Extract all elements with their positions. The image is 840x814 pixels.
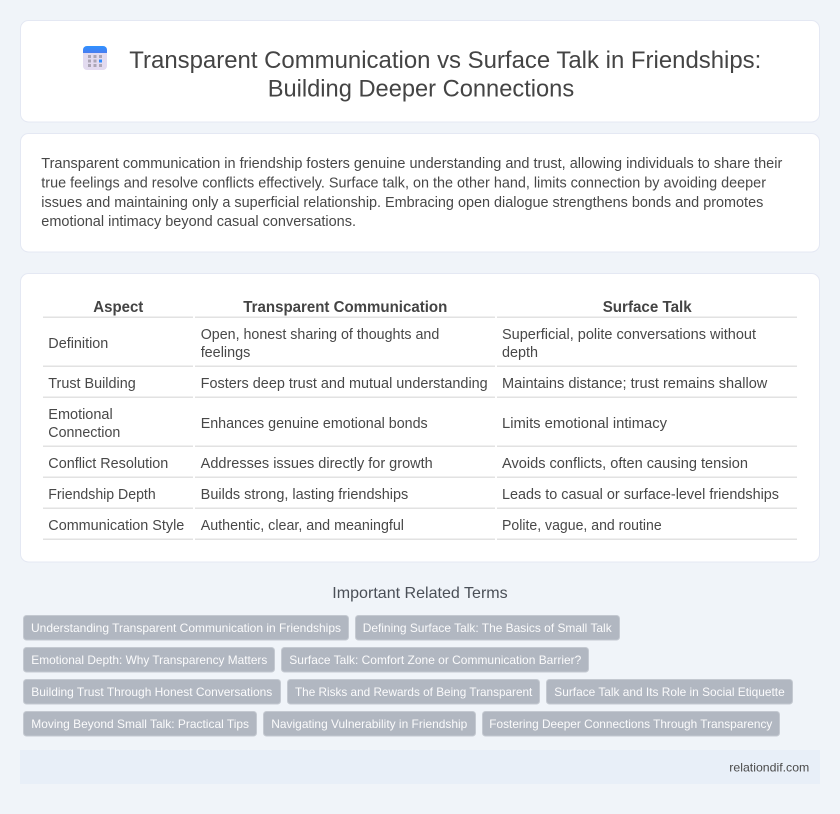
tag: Surface Talk and Its Role in Social Etiquette bbox=[554, 685, 785, 699]
tag bbox=[282, 648, 588, 672]
tag bbox=[482, 712, 780, 736]
tag: Defining Surface Talk: The Basics of Small Talk bbox=[363, 621, 613, 635]
row: communication style: Polite, vague, and routine bbox=[502, 518, 662, 534]
row: trust building: Maintains distance; trust remains shallow bbox=[502, 376, 768, 392]
tag: Moving Beyond Small Talk: Practical Tips bbox=[31, 717, 249, 731]
tag bbox=[546, 680, 792, 704]
tag bbox=[24, 680, 280, 704]
row: emotional connection: Enhances genuine emotional bonds bbox=[201, 416, 428, 432]
tag: Building Trust Through Honest Conversations bbox=[31, 685, 272, 699]
intro text bbox=[41, 156, 782, 230]
row: conflict resolution: Conflict Resolution bbox=[48, 456, 168, 472]
tag: The Risks and Rewards of Being Transparent bbox=[295, 685, 533, 699]
row: emotional connection: Limits emotional intimacy bbox=[502, 416, 668, 432]
panel: related term tags bbox=[24, 616, 792, 736]
footer site name: relationdif.com bbox=[729, 760, 809, 774]
row: friendship depth bbox=[48, 487, 779, 503]
row: friendship depth: Leads to casual or surface-level friendships bbox=[502, 487, 779, 503]
table header row bbox=[93, 299, 692, 316]
row: communication style: Communication Style bbox=[48, 518, 184, 534]
title bbox=[129, 47, 761, 102]
row: definition: Open, honest sharing of thoughts and bbox=[201, 327, 439, 343]
row: emotional connection bbox=[48, 407, 668, 441]
intro text: issues and maintaining only a superficial relationship. Embracing open dialogue strengthens bonds and promotes bbox=[41, 195, 763, 211]
row: friendship depth: Builds strong, lasting friendships bbox=[201, 487, 408, 503]
row: definition: depth bbox=[502, 345, 538, 361]
intro text: true feelings and resolve conflicts effectively. Surface talk, on the other hand, limits connection by avoiding deeper bbox=[41, 175, 766, 191]
panel: comparison table bbox=[20, 274, 820, 562]
row: definition: feelings bbox=[201, 345, 250, 361]
tag bbox=[24, 616, 348, 640]
intro text: Transparent communication in friendship fosters genuine understanding and trust, allowing individuals to share their bbox=[41, 156, 782, 172]
row: definition: Definition bbox=[48, 336, 108, 352]
row: conflict resolution: Addresses issues directly for growth bbox=[201, 456, 433, 472]
tag: Surface Talk: Comfort Zone or Communication Barrier? bbox=[289, 653, 582, 667]
tag: Understanding Transparent Communication in Friendships bbox=[31, 621, 341, 635]
tag bbox=[24, 648, 274, 672]
title: Transparent Communication vs Surface Talk in Friendships: bbox=[129, 47, 761, 74]
panel: header bbox=[20, 20, 820, 122]
title: Building Deeper Connections bbox=[268, 76, 574, 102]
row: definition bbox=[48, 327, 756, 361]
table header row: Aspect bbox=[93, 299, 143, 316]
row: communication style bbox=[48, 518, 662, 534]
tag bbox=[288, 680, 540, 704]
tag: Emotional Depth: Why Transparency Matters bbox=[31, 653, 267, 667]
tag bbox=[264, 712, 476, 736]
footer bbox=[20, 750, 820, 784]
row: emotional connection: Connection bbox=[48, 425, 120, 441]
heading: important related terms: Important Related Terms bbox=[332, 585, 508, 602]
panel: introduction bbox=[20, 134, 820, 252]
tag bbox=[356, 616, 620, 640]
icon: calendar bbox=[83, 46, 107, 70]
row: definition: Superficial, polite conversations without bbox=[502, 327, 756, 343]
row: communication style: Authentic, clear, and meaningful bbox=[201, 518, 404, 534]
row: friendship depth: Friendship Depth bbox=[48, 487, 156, 503]
table header row: Surface Talk bbox=[603, 299, 692, 316]
row: trust building bbox=[48, 376, 768, 392]
row: conflict resolution bbox=[48, 456, 748, 472]
table header row: Transparent Communication bbox=[243, 299, 447, 316]
tag: Fostering Deeper Connections Through Transparency bbox=[489, 717, 772, 731]
tag: Navigating Vulnerability in Friendship bbox=[271, 717, 468, 731]
row: conflict resolution: Avoids conflicts, often causing tension bbox=[502, 456, 748, 472]
row: trust building: Fosters deep trust and mutual understanding bbox=[201, 376, 488, 392]
row: emotional connection: Emotional bbox=[48, 407, 113, 423]
tag bbox=[24, 712, 256, 736]
intro text: emotional intimacy beyond casual conversations. bbox=[41, 214, 356, 230]
row: trust building: Trust Building bbox=[48, 376, 136, 392]
